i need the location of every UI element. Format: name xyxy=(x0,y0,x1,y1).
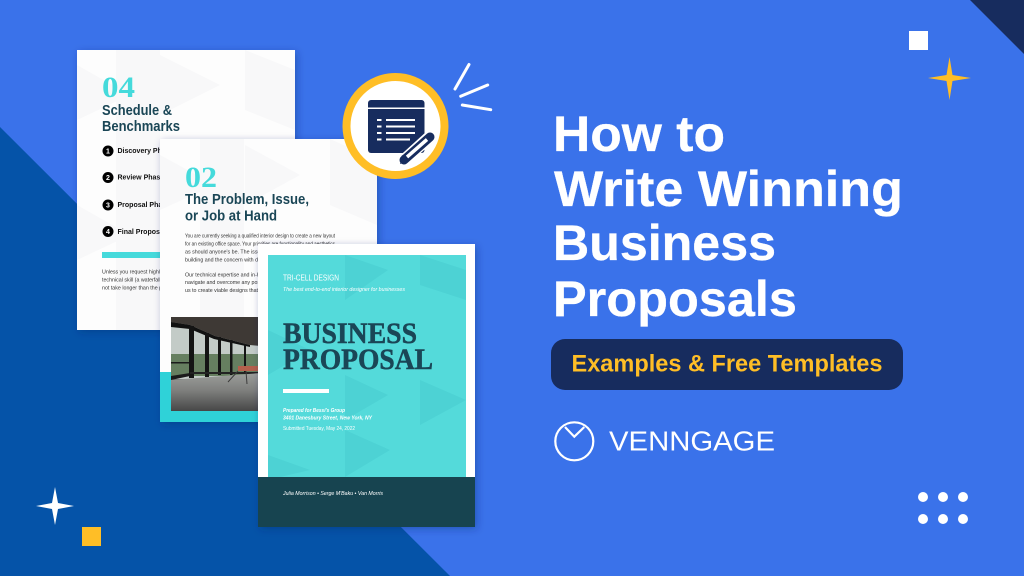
client details xyxy=(283,408,373,432)
client details: Submitted Tuesday, May 24, 2022 xyxy=(283,426,355,432)
heading: The Problem, Issue, or Job at Hand xyxy=(185,192,309,224)
heading: Schedule & Benchmarks: Schedule & xyxy=(102,103,172,119)
subtitle pill xyxy=(551,339,903,390)
background: dark blue corner xyxy=(0,127,450,576)
teal footer band xyxy=(160,372,377,422)
decoration: dot grid xyxy=(918,492,968,524)
heading: Schedule & Benchmarks xyxy=(102,103,180,135)
phase list: 4 xyxy=(106,229,110,236)
phase list: 3 xyxy=(106,202,110,210)
page number 02: 02 xyxy=(185,161,217,194)
decoration: gold square xyxy=(82,527,101,546)
icon: gold sparkle xyxy=(928,57,971,100)
body text: as should anyone's be. The issue you face is xyxy=(185,250,291,256)
title: Write Winning xyxy=(554,161,903,217)
phase list: Discovery Phase xyxy=(118,148,174,155)
logo: Venngage: VENNGAGE xyxy=(609,426,775,457)
cover title: PROPOSAL xyxy=(283,343,433,376)
decoration: white square xyxy=(909,31,928,50)
title: Proposals xyxy=(553,271,797,327)
body text: You are currently seeking a qualified interior design to create a new layout xyxy=(185,234,335,240)
company name: TRI-CELL DESIGN xyxy=(283,274,339,282)
client details: 3401 Danesbury Street, New York, NY xyxy=(283,416,373,422)
body text: technical skill (a waterfall installation) will xyxy=(102,278,198,284)
photo: office interior xyxy=(171,317,258,411)
dark footer band xyxy=(258,477,475,527)
tagline: The best end-to-end interior designer for businesses xyxy=(283,287,405,293)
document window xyxy=(368,100,424,153)
panel: proposal page 04 schedule xyxy=(77,50,295,330)
body text: Our technical expertise and in-house team xyxy=(185,272,285,278)
pencil xyxy=(400,136,430,164)
body text: not take longer than the proposed time xyxy=(102,286,193,292)
page number 04: 04 xyxy=(102,71,135,104)
body text: Unless you request highly specialized work xyxy=(102,270,203,276)
teal cover area xyxy=(268,255,466,477)
cover title: BUSINESS xyxy=(283,317,417,350)
icon: emphasis rays xyxy=(455,64,491,110)
heading: Schedule & Benchmarks: Benchmarks xyxy=(102,119,180,135)
panel: proposal page 02 problem xyxy=(160,139,377,422)
heading: The Problem, Issue, or Job at Hand: The Problem, Issue, xyxy=(185,192,309,208)
phase list: 2 xyxy=(106,175,110,182)
phase list: 1 xyxy=(106,148,110,156)
title xyxy=(553,106,903,327)
body text: building and the concern with disparate xyxy=(185,258,277,264)
body text: navigate and overcome any possible issues xyxy=(185,280,288,286)
body text: for an existing office space. Your priorities are functionality and aesthetics xyxy=(185,242,335,248)
teal divider bar xyxy=(102,252,212,258)
phase list: Final Proposal xyxy=(118,229,166,236)
body text: us to create viable designs that will work xyxy=(185,288,280,294)
background: navy corner triangle xyxy=(970,0,1024,54)
logo: Venngage xyxy=(555,422,775,460)
title: How to xyxy=(553,106,725,162)
subtitle pill: Examples & Free Templates xyxy=(572,350,882,378)
title: Business xyxy=(553,215,776,271)
phase list: Proposal Phase xyxy=(118,202,170,209)
icon: proposal document in gold ring xyxy=(346,77,444,175)
icon: white sparkle xyxy=(36,487,74,525)
panel: business proposal cover xyxy=(258,244,475,527)
body text xyxy=(102,270,203,292)
client details: Prepared for Bessi's Group xyxy=(283,408,346,414)
list lines xyxy=(377,120,415,140)
body text xyxy=(185,234,335,294)
heading: The Problem, Issue, or Job at Hand: or Job at Hand xyxy=(185,208,277,224)
phase list xyxy=(102,146,174,237)
footer names: Julia Morrison • Serge M'Baku • Van Morris xyxy=(282,491,383,497)
phase list: Review Phase xyxy=(118,174,164,182)
white bar xyxy=(283,389,329,393)
cover title xyxy=(283,317,433,376)
